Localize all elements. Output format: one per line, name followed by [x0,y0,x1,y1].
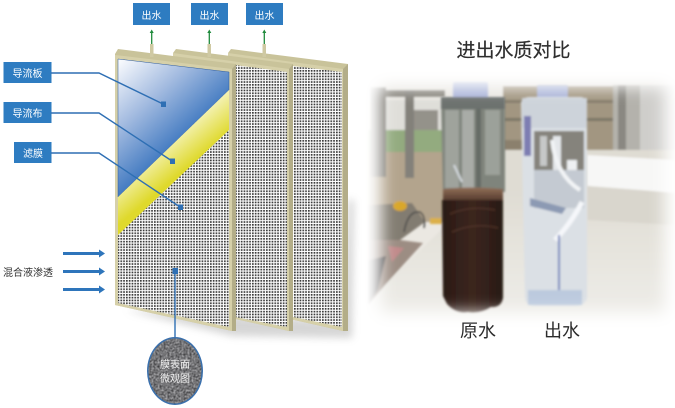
panel: middle membrane sheet [173,49,293,331]
callout: flow guide plate [4,62,166,107]
membrane surface microscopic view callout [147,268,203,405]
callout: flow guide plate: 导流板 [12,67,42,80]
label: outlet water 1 [133,3,170,25]
label: treated water: 出水 [544,321,580,341]
label: raw water: 原水 [460,321,496,341]
label: outlet water 3 [246,3,283,25]
heading: water quality comparison: 进出水质对比 [456,40,571,62]
membrane surface microscopic view callout: 膜表面 [160,358,190,371]
raw water bottle [441,82,505,312]
callout: flow guide cloth: 导流布 [12,107,42,120]
panel: front membrane sheet [115,49,236,331]
panel: rear membrane sheet [228,49,348,331]
panel: membrane module diagram [115,30,354,338]
callout: filter membrane [14,142,183,210]
label: outlet water 3: 出水 [254,9,274,22]
label: outlet water 1: 出水 [142,9,162,22]
callout: flow guide cloth [4,102,175,164]
flow guide plate layer [118,59,229,197]
photo background [369,84,669,301]
photo: water samples comparison [369,81,672,316]
outlet pipes with green arrows [150,30,266,57]
membrane surface microscopic view callout: 微观图 [160,372,190,385]
filter membrane layer [118,59,229,327]
label: mixed liquor permeation: 混合液渗透 [3,266,53,279]
callout: filter membrane: 滤膜 [23,147,43,160]
panel shadow [125,200,354,338]
label: outlet water 2: 出水 [200,9,220,22]
label: outlet water 2 [191,3,228,25]
inflow arrows [63,250,105,294]
flow guide cloth layer [118,90,229,235]
treated water bottle [521,85,587,306]
